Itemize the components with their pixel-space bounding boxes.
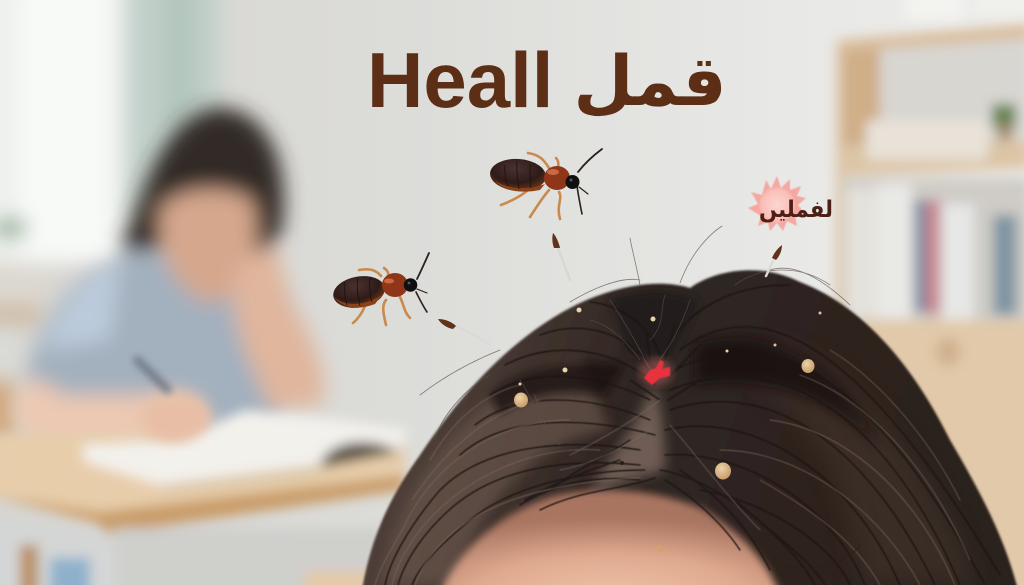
- stray flyaway hairs: [420, 226, 860, 568]
- icon: upper louse: [489, 149, 602, 219]
- desk: [0, 430, 405, 530]
- open book: [82, 410, 408, 485]
- parting scalp: [590, 385, 665, 492]
- window and curtain: [0, 0, 220, 440]
- hand: [140, 394, 210, 442]
- icon: lower louse: [331, 253, 429, 325]
- hair mass: [362, 270, 1018, 585]
- lighter hair highlights: [375, 350, 970, 585]
- nits on hair: [514, 308, 822, 552]
- blurred girl at desk: [12, 108, 324, 446]
- icon: nit on hair, right: [766, 245, 782, 276]
- lighter sweep on left hair: [380, 360, 610, 585]
- icon: pink burst with label: [748, 176, 833, 231]
- red irritated spot: [639, 358, 673, 386]
- title: Heall: [367, 36, 553, 124]
- forehead: [438, 490, 782, 585]
- icon: nit on hair, left: [438, 319, 489, 344]
- title: [367, 36, 727, 124]
- title: قمل: [573, 42, 727, 122]
- icon: nit on hair, top: [552, 233, 570, 280]
- hair strands: [385, 285, 1000, 585]
- dark shadows along parting: [490, 363, 625, 415]
- shelf: [836, 0, 1024, 585]
- label: لفمليں: [759, 197, 833, 223]
- head with hair and scalp: [362, 226, 1018, 585]
